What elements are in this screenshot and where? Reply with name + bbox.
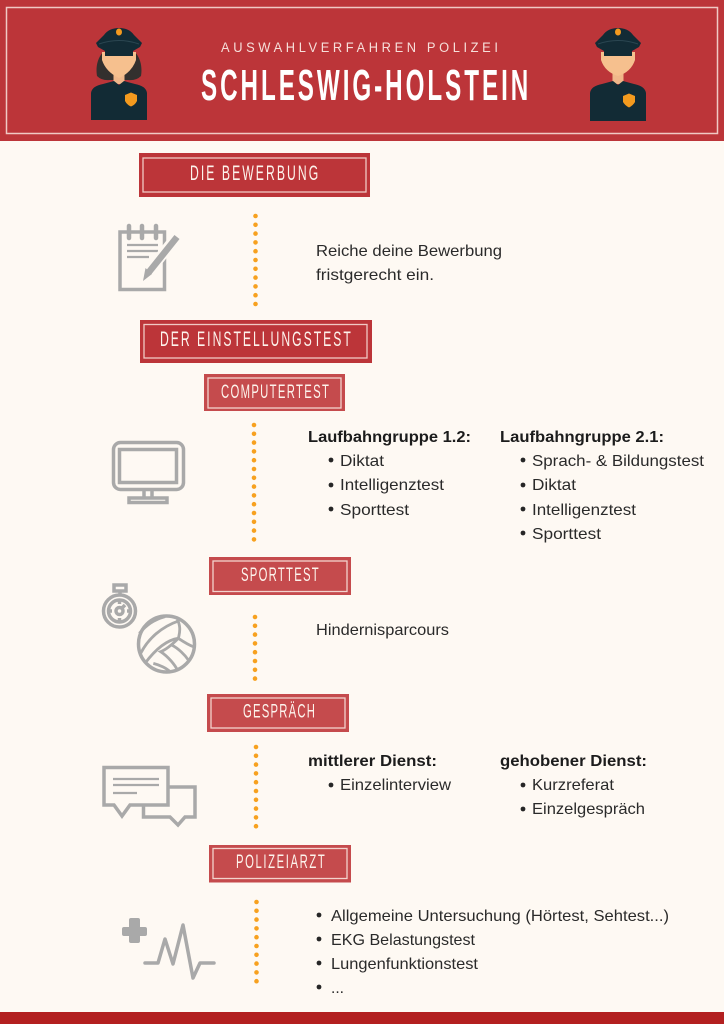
heading: Gespräch: GESPRÄCH bbox=[243, 700, 315, 722]
heading: Gespräch bbox=[207, 694, 349, 732]
timeline: Gespräch dots bbox=[254, 747, 258, 828]
text: Sporttest: Hindernisparcours bbox=[316, 622, 449, 639]
text: Polizeiarzt list: Lungenfunktionstest bbox=[331, 956, 479, 973]
text: gehobener Dienst: Kurzreferat bbox=[532, 777, 615, 794]
text: Polizeiarzt list: Allgemeine Untersuchung (Hörtest, Sehtest...) bbox=[331, 908, 669, 925]
text: Laufbahngruppe 2.1: Diktat bbox=[532, 477, 577, 494]
text: Laufbahngruppe 2.1: Intelligenztest bbox=[532, 502, 637, 519]
text: mittlerer Dienst bbox=[308, 753, 451, 794]
heading: Die Bewerbung bbox=[139, 153, 370, 197]
text: Laufbahngruppe 1.2: Laufbahngruppe 1.2: bbox=[308, 429, 471, 446]
heading: Der Einstellungstest: DER EINSTELLUNGSTEST bbox=[160, 326, 351, 351]
icon: male police officer bbox=[590, 28, 646, 121]
text: Bewerbung: Reiche deine Bewerbung bbox=[316, 243, 502, 260]
icon: stopwatch bbox=[104, 585, 136, 627]
heading: Polizeiarzt bbox=[209, 845, 351, 882]
timeline: Computertest dots bbox=[252, 425, 256, 541]
heading: Computertest: COMPUTERTEST bbox=[221, 382, 329, 403]
heading: Der Einstellungstest bbox=[140, 320, 372, 363]
text: Bewerbung: fristgerecht ein. bbox=[316, 267, 434, 284]
icon: chat bubbles bbox=[104, 768, 195, 825]
text: Laufbahngruppe 2.1: Sprach- & Bildungstest bbox=[532, 453, 705, 470]
text: Laufbahngruppe 2.1: Sporttest bbox=[532, 526, 602, 543]
text: Laufbahngruppe 1.2: Intelligenztest bbox=[340, 477, 445, 494]
text: Laufbahngruppe 1.2 bbox=[308, 429, 471, 519]
heading: Die Bewerbung: DIE BEWERBUNG bbox=[190, 160, 318, 185]
text: Laufbahngruppe 2.1: Laufbahngruppe 2.1: bbox=[500, 429, 664, 446]
heading: Computertest bbox=[204, 374, 345, 411]
header subtitle: AUSWAHLVERFAHREN POLIZEI bbox=[221, 40, 498, 55]
text: Laufbahngruppe 1.2: Sporttest bbox=[340, 502, 410, 519]
text: Polizeiarzt list: EKG Belastungstest bbox=[331, 932, 476, 949]
header title: SCHLESWIG-HOLSTEIN bbox=[201, 60, 528, 110]
heading: Sporttest bbox=[209, 557, 351, 595]
timeline: Polizeiarzt dots bbox=[254, 902, 259, 984]
timeline: Bewerbung dots bbox=[253, 216, 258, 306]
icon: computer monitor bbox=[114, 442, 184, 502]
heading: Sporttest: SPORTTEST bbox=[241, 565, 319, 586]
text: Bewerbung bbox=[316, 243, 502, 284]
text: gehobener Dienst bbox=[500, 753, 647, 818]
text: mittlerer Dienst: Einzelinterview bbox=[340, 777, 451, 794]
text: Laufbahngruppe 2.1 bbox=[500, 429, 705, 543]
icon: notepad and pencil bbox=[120, 226, 177, 290]
text: Laufbahngruppe 1.2: Diktat bbox=[340, 453, 385, 470]
text: gehobener Dienst: gehobener Dienst: bbox=[500, 753, 647, 770]
icon: female police officer bbox=[91, 28, 147, 120]
text: Polizeiarzt list: ... bbox=[331, 980, 344, 997]
text: Polizeiarzt list bbox=[317, 908, 669, 997]
text: mittlerer Dienst: mittlerer Dienst: bbox=[308, 753, 437, 770]
heading: Polizeiarzt: POLIZEIARZT bbox=[236, 852, 325, 873]
icon: volleyball bbox=[138, 616, 194, 672]
timeline: Sporttest dots bbox=[253, 617, 257, 680]
header banner bbox=[0, 0, 724, 141]
footer bar bbox=[0, 1012, 724, 1024]
text: gehobener Dienst: Einzelgespräch bbox=[532, 801, 645, 818]
icon: medical cross and heartbeat bbox=[122, 918, 214, 978]
